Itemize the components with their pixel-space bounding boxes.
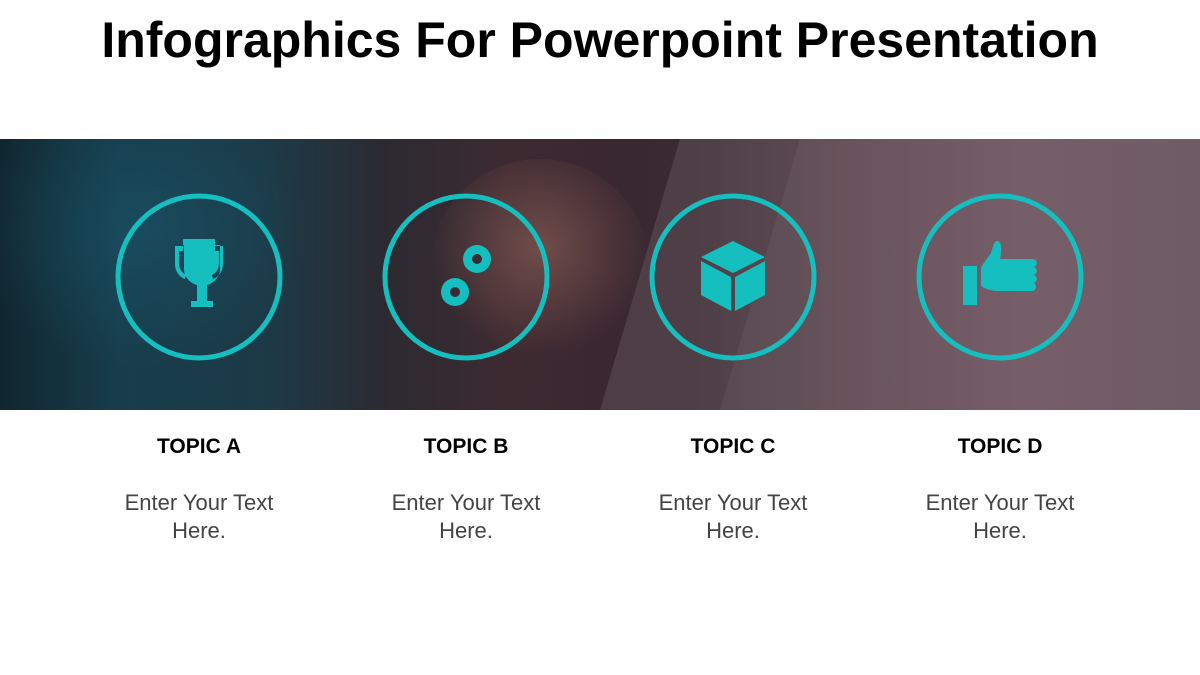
text A: Enter Your Text: [125, 490, 273, 515]
photo band: [0, 139, 1200, 410]
icon: trophy: [118, 196, 280, 358]
text C: Here.: [706, 518, 760, 543]
text B: Here.: [439, 518, 493, 543]
icon: gears: [385, 196, 547, 358]
text C: Enter Your Text: [659, 490, 807, 515]
text B: Enter Your Text: [392, 490, 540, 515]
text A: Here.: [172, 518, 226, 543]
topic C: TOPIC C: [691, 435, 775, 458]
topic A: TOPIC A: [157, 435, 241, 458]
text A: [125, 490, 274, 543]
text B: [392, 490, 540, 543]
text D: Here.: [973, 518, 1027, 543]
text D: [926, 490, 1074, 543]
icon: thumbs up: [919, 196, 1081, 358]
topic B: TOPIC B: [424, 435, 508, 458]
text D: Enter Your Text: [926, 490, 1074, 515]
text C: [659, 490, 808, 543]
title: Infographics For Powerpoint Presentation: [101, 12, 1099, 68]
topic D: TOPIC D: [958, 435, 1042, 458]
icon: box: [652, 196, 814, 358]
